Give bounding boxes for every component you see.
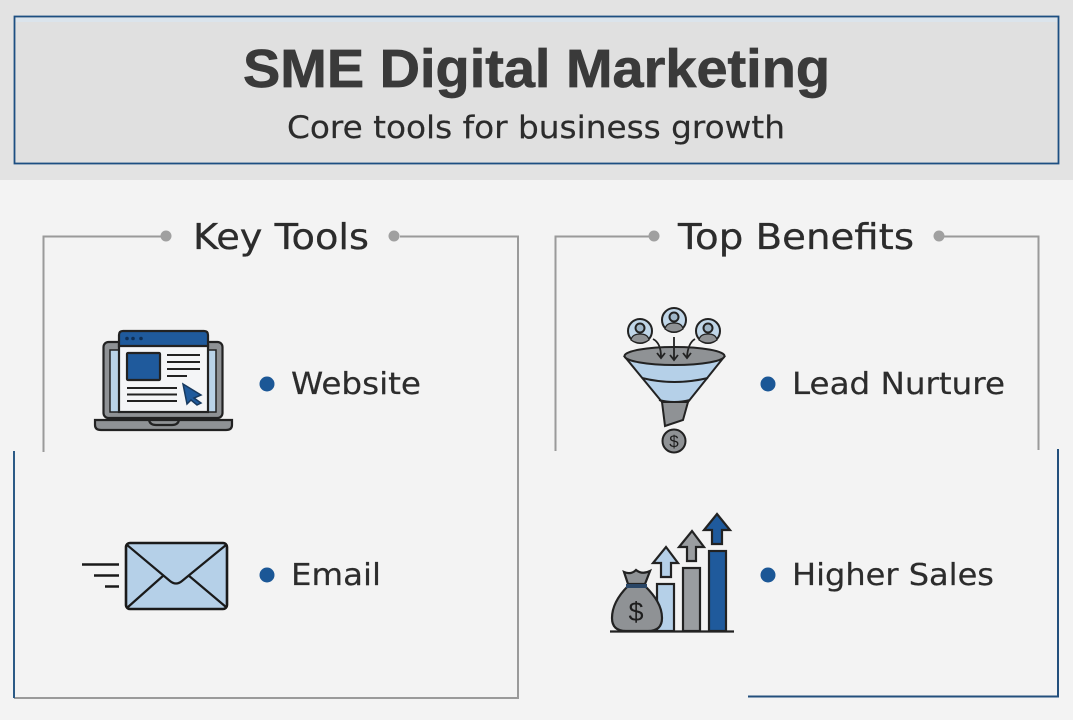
bullet: higher sales (760, 568, 776, 582)
panel: key tools (14, 217, 518, 698)
label: higher sales: Higher Sales (792, 558, 994, 593)
bullet: lead nurture (760, 376, 776, 392)
label: website: Website (291, 367, 421, 402)
heading: top benefits: Top Benefits (677, 217, 914, 258)
panel: top benefits (556, 217, 1058, 696)
header banner (14, 16, 1058, 164)
subtitle: Core tools for business growth (287, 110, 785, 146)
dollar symbol: $ (669, 432, 679, 451)
icon: sales growth (610, 514, 734, 632)
icon: laptop with website (95, 331, 232, 430)
heading: key tools: Key Tools (193, 217, 369, 258)
bullet: website (260, 376, 274, 392)
dollar symbol: $ (628, 597, 644, 627)
icon: funnel (624, 308, 724, 452)
bullet: email (260, 568, 274, 582)
icon: email (82, 543, 227, 609)
label: lead nurture: Lead Nurture (792, 367, 1005, 402)
title: SME Digital Marketing (243, 39, 830, 99)
label: email: Email (291, 558, 381, 593)
